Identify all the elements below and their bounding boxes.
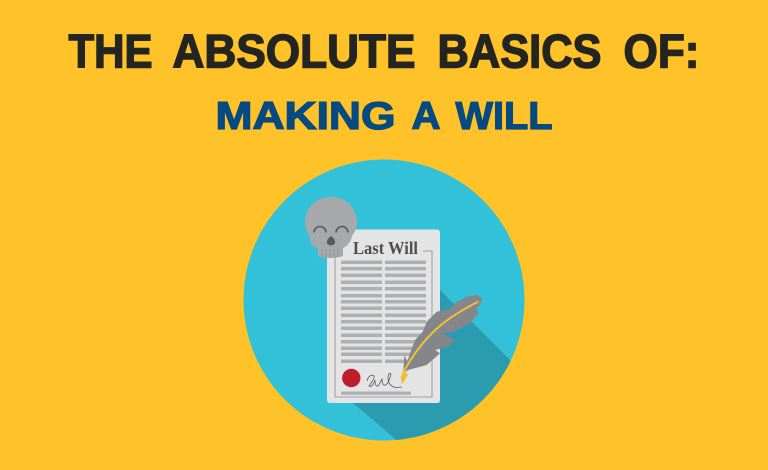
skull — [305, 197, 357, 258]
long drop shadow — [353, 290, 511, 440]
title: OF: — [624, 24, 700, 78]
skull cranium — [305, 197, 357, 258]
text lines — [341, 260, 426, 363]
subtitle: MAKING — [216, 95, 396, 138]
feather spine — [403, 302, 478, 373]
title: ABSOLUTE — [172, 24, 416, 78]
red wax seal — [342, 369, 360, 387]
eyes — [314, 226, 348, 232]
illustration: last will in circle — [244, 160, 530, 460]
title — [68, 24, 700, 78]
teeth — [322, 249, 338, 258]
signature — [367, 373, 402, 387]
title: THE — [68, 24, 152, 78]
footer line — [341, 392, 411, 395]
title: BASICS — [438, 24, 602, 78]
subtitle: A — [412, 95, 440, 138]
subtitle: WILL — [456, 95, 552, 138]
paper sheet — [327, 230, 440, 403]
feather vane — [403, 295, 482, 373]
heading: last will: Last Will — [353, 238, 418, 258]
subtitle — [216, 95, 552, 138]
pen nib — [400, 370, 408, 384]
nose — [327, 236, 335, 245]
document — [327, 230, 440, 403]
quill — [400, 295, 482, 384]
inner border — [335, 251, 432, 397]
teal circle background — [244, 160, 524, 440]
